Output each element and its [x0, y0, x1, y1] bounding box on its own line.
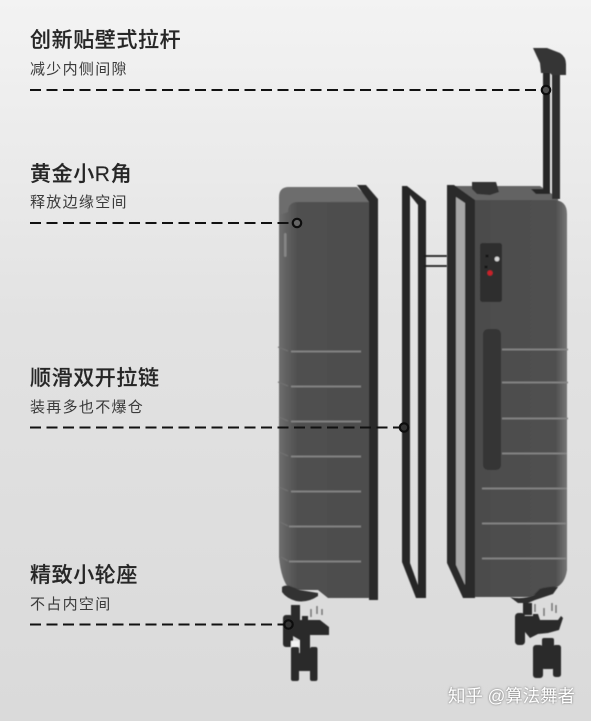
top surface of left shell [279, 187, 372, 215]
watermark: 知乎 @算法舞者 [448, 686, 575, 706]
side wheel [283, 615, 293, 647]
wheel housing on shell [510, 587, 558, 603]
subheading: 装再多也不爆仓 [30, 399, 144, 416]
handle grip [533, 48, 566, 75]
spring marks [535, 603, 556, 616]
right shell body [474, 200, 567, 597]
side wheel [515, 613, 525, 645]
lower wheel left [291, 647, 299, 681]
top post [291, 605, 300, 621]
wheel housing on shell [282, 586, 318, 601]
subheading: 不占内空间 [30, 596, 112, 613]
leader line [30, 426, 400, 428]
frame connector lines [424, 256, 447, 266]
right shell rim [447, 185, 475, 598]
side recess [284, 233, 286, 257]
subheading: 减少内侧间隙 [30, 61, 128, 78]
stem and hub [542, 638, 554, 669]
top surface of right shell [452, 186, 558, 204]
callout: corner [30, 163, 301, 227]
marker [542, 86, 550, 94]
side slot handle [483, 329, 501, 470]
right shell ribs [482, 350, 568, 558]
telescopic handle pole left [531, 72, 550, 194]
gap in wheel [291, 641, 299, 646]
marker [284, 620, 293, 629]
leader line [30, 624, 284, 626]
stem and hub [297, 634, 312, 671]
callout: telescopic handle [30, 29, 550, 94]
left shell body [279, 202, 370, 598]
lower wheel left [533, 645, 543, 678]
leader line [30, 89, 542, 91]
bracket [525, 614, 563, 638]
light inner edge [455, 195, 466, 590]
lower wheel right [553, 645, 561, 677]
left shell rim [357, 185, 378, 600]
subheading: 释放边缘空间 [30, 194, 128, 211]
right suitcase shell [447, 48, 568, 598]
spring marks [311, 606, 322, 617]
leader line [30, 222, 292, 224]
zipper frame [402, 186, 447, 598]
callout: zipper [30, 367, 408, 432]
combination lock [480, 243, 502, 302]
callout: wheel seat [30, 564, 293, 629]
bracket [293, 616, 329, 640]
heading: 黄金小R角 [30, 163, 132, 186]
right wheel assembly [510, 587, 563, 678]
frame outline [402, 186, 426, 598]
left shell ribs [278, 347, 361, 562]
top carry handle [472, 182, 499, 195]
marker [400, 423, 408, 432]
left wheel assembly [282, 586, 329, 681]
top post [523, 603, 532, 615]
heading: 顺滑双开拉链 [30, 367, 160, 390]
heading: 精致小轮座 [30, 564, 138, 587]
telescopic handle pole right [552, 75, 560, 199]
left suitcase shell [278, 185, 378, 600]
heading: 创新贴壁式拉杆 [30, 29, 181, 52]
marker [293, 219, 301, 227]
lower wheel right [310, 647, 318, 681]
